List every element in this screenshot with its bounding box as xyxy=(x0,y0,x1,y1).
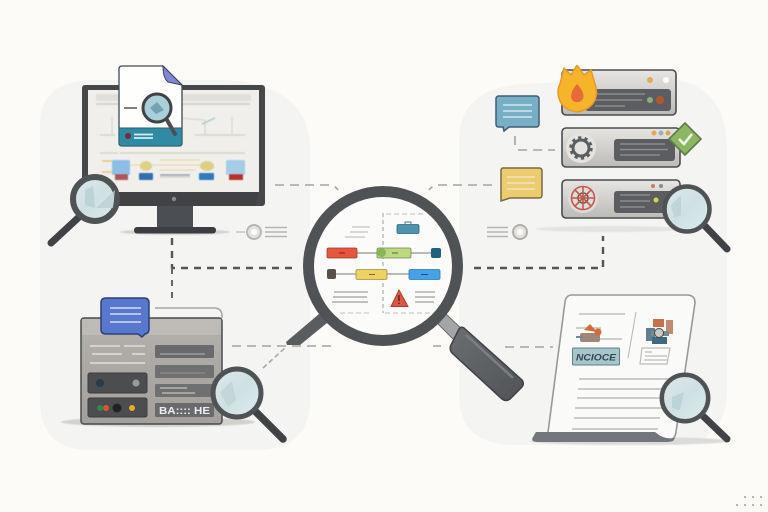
right collar xyxy=(436,313,466,342)
left text lines xyxy=(90,346,145,363)
icon: green check badge xyxy=(669,123,701,155)
connector: small dash by center handle xyxy=(433,345,441,347)
navy node xyxy=(431,248,441,258)
speech bubble: blue xyxy=(496,96,539,131)
magnifier: servers xyxy=(664,186,727,249)
yellow node xyxy=(356,270,387,280)
document page xyxy=(119,66,182,146)
page fold xyxy=(163,66,182,85)
warning triangle xyxy=(391,290,408,306)
icon: red wheel xyxy=(572,186,594,210)
connector: lower left xyxy=(232,345,334,347)
laptop base xyxy=(532,432,675,442)
right note lines xyxy=(415,292,435,302)
left handle xyxy=(286,314,327,345)
panel: left background xyxy=(40,80,310,450)
connector: upper right xyxy=(429,185,492,190)
server 2 xyxy=(562,128,680,167)
central magnifier xyxy=(286,192,523,400)
notice label: NCIOCE xyxy=(576,352,617,364)
icon: machine xyxy=(576,324,602,342)
right rows: BA:::: HE xyxy=(159,406,210,417)
connector: left drop xyxy=(171,268,173,302)
right rows xyxy=(155,345,214,417)
icon: gear xyxy=(570,138,592,158)
connector: main left xyxy=(172,238,298,268)
icon: right status node xyxy=(487,225,527,239)
brown node xyxy=(327,269,336,279)
server 1 xyxy=(562,70,676,115)
connector: bubble to server xyxy=(515,136,555,150)
report header lines xyxy=(576,314,625,339)
connector: lower diagonal xyxy=(263,347,286,368)
monitor body xyxy=(82,85,265,206)
connector: main right xyxy=(474,236,603,268)
lens diagram xyxy=(327,213,441,313)
report document xyxy=(530,295,730,445)
left note lines xyxy=(332,292,368,302)
server stack xyxy=(535,70,685,232)
report text lines xyxy=(572,379,670,429)
server 3 xyxy=(562,180,680,218)
green node xyxy=(377,248,411,258)
speech bubble: yellow xyxy=(501,168,542,201)
screen diagram xyxy=(96,94,251,180)
dashed connectors xyxy=(155,136,603,368)
magnifier: report xyxy=(662,375,727,439)
connector: chat to box xyxy=(155,308,222,318)
report page xyxy=(547,295,695,440)
speech bubble: indigo xyxy=(101,298,149,337)
indicator row xyxy=(88,398,147,417)
notice label xyxy=(572,348,620,365)
connector: lower right xyxy=(505,346,553,348)
monitor xyxy=(82,85,265,235)
panel: right background xyxy=(459,78,727,445)
lens xyxy=(308,192,458,340)
icon: cluster xyxy=(646,319,673,344)
briefcase icon xyxy=(397,222,419,234)
teal footer band xyxy=(119,128,182,146)
small form box xyxy=(640,348,670,364)
document magnifier xyxy=(143,94,175,134)
icon: left status node xyxy=(236,225,287,239)
icon: flame xyxy=(558,65,596,112)
ui panel box xyxy=(61,318,255,427)
magnifier: ui panel xyxy=(213,369,283,439)
dark control row xyxy=(88,373,147,393)
sparkle mark xyxy=(736,496,762,506)
magnifier: monitor xyxy=(51,177,117,243)
right grip xyxy=(450,327,523,400)
connector: upper left xyxy=(275,185,338,190)
monitor stand xyxy=(157,205,193,228)
blue node xyxy=(409,270,440,280)
red node xyxy=(327,248,357,258)
document with magnifier xyxy=(119,66,182,146)
